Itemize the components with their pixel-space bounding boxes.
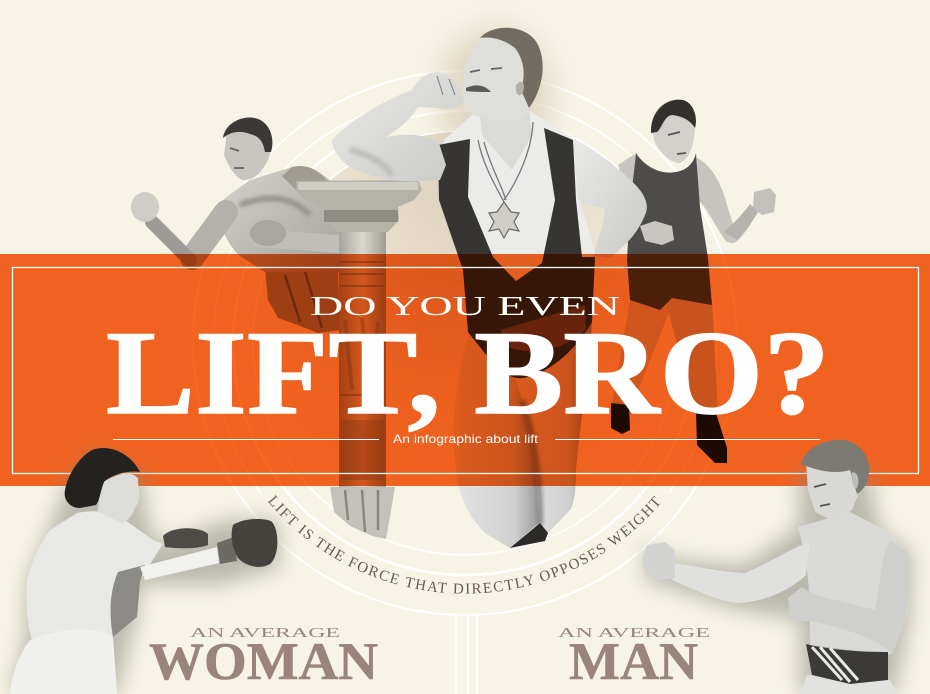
subtitle with rules: An infographic about lift [393, 432, 539, 446]
column capital [296, 180, 422, 232]
orange banner [0, 254, 930, 486]
woman hair [65, 448, 140, 508]
figure: stone column [296, 180, 422, 539]
woman boxing gloves [217, 537, 237, 564]
right boxer head [652, 100, 695, 163]
right boxer far fist [753, 188, 776, 215]
left boxer trunks and legs [265, 268, 340, 333]
strongman vest and trunks [438, 128, 595, 378]
young man torso [798, 512, 908, 655]
label: an average man: AN AVERAGE [558, 626, 710, 641]
label: an average woman: WOMAN [149, 633, 378, 691]
banner frame [12, 268, 918, 474]
column acanthus base [330, 487, 395, 539]
young man trunks [800, 675, 897, 694]
concentric rings and inner disc [193, 71, 737, 694]
woman head [98, 474, 139, 523]
woman dress [10, 511, 163, 694]
strongman right arm [573, 138, 647, 258]
right boxer arms [697, 158, 738, 243]
young man head [806, 462, 862, 522]
young man extended arm [672, 542, 810, 603]
figure: left boxer [131, 118, 341, 333]
woman arm [140, 547, 219, 580]
strongman boots [510, 523, 548, 548]
strongman necklace [478, 122, 533, 202]
title kicker: DO YOU EVEN [310, 291, 620, 321]
strongman star pendant [489, 202, 519, 238]
strongman hair [480, 28, 543, 108]
young man glow [645, 470, 912, 694]
right boxer fist [640, 221, 674, 245]
main title: LIFT, BRO? [106, 306, 830, 439]
glow behind central figure [437, 27, 553, 163]
strongman head [463, 32, 538, 121]
young man fist [642, 542, 675, 580]
young man belt [806, 644, 888, 684]
figure: young male boxer [642, 440, 912, 694]
figure: woman boxer [10, 448, 280, 694]
strongman legs [454, 330, 540, 548]
strongman bent arm [332, 72, 464, 181]
young man hair [801, 440, 869, 494]
figure: right boxer [611, 100, 776, 463]
curved caption: LIFT IS THE FORCE THAT DIRECTLY OPPOSES WEIGHT [268, 494, 660, 594]
strongman neck [478, 100, 532, 170]
strongman face details [470, 68, 502, 72]
figure: central strongman [332, 28, 647, 548]
left boxer torso [216, 167, 341, 272]
label: an average man: MAN [569, 633, 698, 691]
left boxer head [224, 118, 272, 180]
young man near arm and hand [788, 540, 909, 654]
column shaft [339, 218, 386, 490]
woman glow [10, 450, 280, 694]
label: an average woman: AN AVERAGE [190, 626, 340, 641]
strongman torso [440, 108, 596, 330]
right boxer singlet and trunks [627, 153, 712, 310]
left boxer fists [131, 192, 159, 222]
left boxer extended arm [192, 212, 226, 258]
right boxer legs and boots [612, 300, 672, 410]
